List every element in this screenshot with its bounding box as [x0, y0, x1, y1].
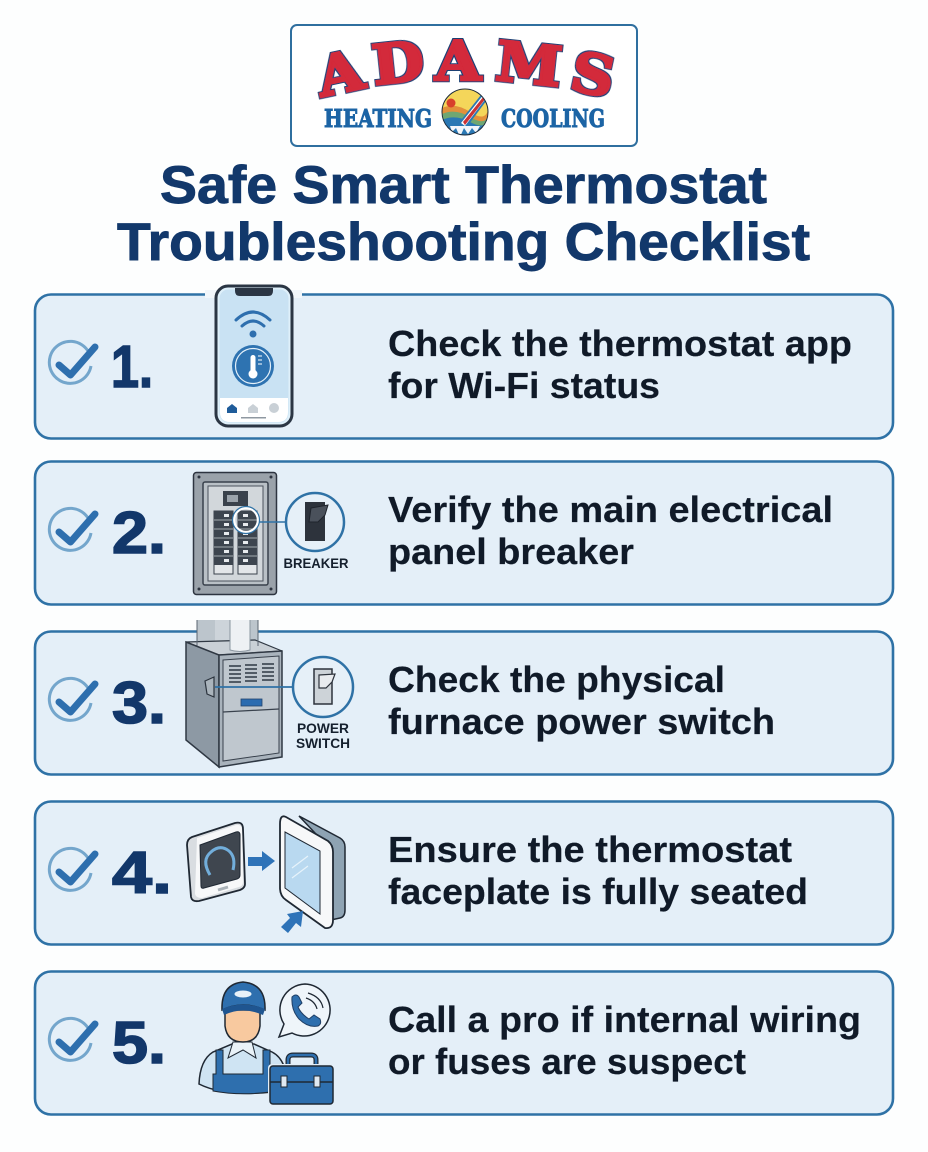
panel: step 4 — [35, 802, 893, 944]
step 5 text — [388, 999, 861, 1082]
logo: Adams Heating & Cooling: A — [310, 39, 370, 110]
title — [117, 156, 810, 272]
logo: Adams Heating & Cooling: S — [565, 40, 620, 110]
step 4 text — [388, 829, 808, 912]
icon: thermostat faceplate being seated — [187, 816, 345, 933]
step 2 text: Verify the main electrical — [388, 489, 833, 530]
icon: furnace with power switch callout: SWITCH — [296, 735, 350, 751]
step 5 text: or fuses are suspect — [388, 1041, 746, 1082]
logo: Adams Heating & Cooling — [291, 25, 637, 146]
logo: Adams Heating & Cooling: D — [369, 30, 427, 98]
step 3 text: Check the physical — [388, 659, 725, 700]
check icon 5 — [49, 1018, 95, 1060]
title: Safe Smart Thermostat — [160, 156, 767, 215]
step 4 text: Ensure the thermostat — [388, 829, 792, 870]
step 1 text — [388, 323, 852, 406]
check icon 2 — [49, 508, 95, 550]
panel: step 3 — [35, 620, 893, 774]
step 5 text: Call a pro if internal wiring — [388, 999, 861, 1040]
check icon 4 — [49, 848, 95, 890]
icon: furnace with power switch callout — [186, 620, 353, 767]
number 1: 1. — [111, 334, 153, 400]
number 2: 2. — [112, 500, 166, 566]
number 4: 4. — [112, 840, 172, 906]
logo: Adams Heating & Cooling: M — [493, 30, 565, 100]
number 3: 3. — [112, 670, 166, 736]
icon: furnace with power switch callout: POWER — [297, 720, 349, 736]
step 1 text: Check the thermostat app — [388, 323, 852, 364]
step 3 text — [388, 659, 775, 742]
check icon 3 — [49, 678, 95, 720]
logo: Adams Heating & Cooling: HEATING — [324, 104, 432, 133]
step 4 text: faceplate is fully seated — [388, 871, 808, 912]
logo: Adams Heating & Cooling: COOLING — [501, 104, 605, 133]
icon: technician with phone and toolbox — [199, 982, 334, 1105]
number 5: 5. — [112, 1010, 166, 1076]
icon: electrical panel with breaker callout: BREAKER — [284, 555, 348, 571]
logo: Adams Heating & Cooling: A — [434, 31, 482, 93]
icon: phone with Wi-Fi and thermometer — [216, 286, 292, 426]
icon: electrical panel with breaker callout — [194, 472, 348, 594]
title: Troubleshooting Checklist — [117, 213, 810, 272]
step 1 text: for Wi-Fi status — [388, 365, 660, 406]
panel: step 5 — [35, 972, 893, 1114]
step 3 text: furnace power switch — [388, 701, 775, 742]
panel: step 1 — [35, 286, 893, 438]
check icon 1 — [49, 341, 95, 383]
step 2 text: panel breaker — [388, 531, 634, 572]
panel: step 2 — [35, 462, 893, 604]
step 2 text — [388, 489, 833, 572]
